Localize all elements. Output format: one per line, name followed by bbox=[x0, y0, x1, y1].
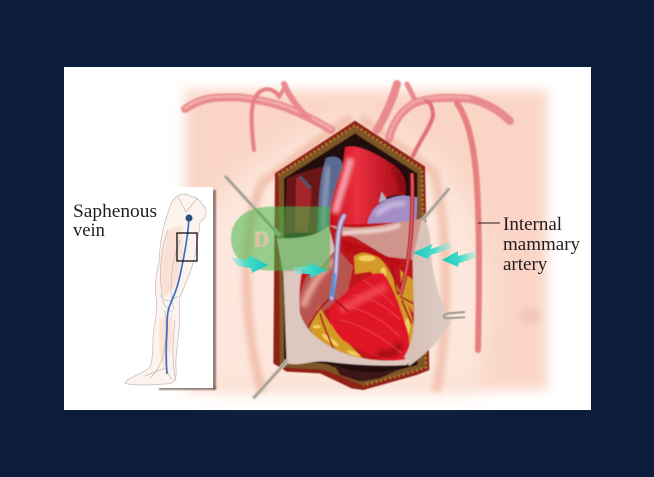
fat highlights bbox=[313, 255, 410, 357]
fat yellow bbox=[354, 253, 414, 353]
chest opening bbox=[225, 121, 465, 398]
saphenous vein line bbox=[166, 218, 189, 374]
left lung area bbox=[285, 167, 330, 233]
label: internal mammary artery: artery bbox=[503, 254, 548, 275]
arrow: far right bbox=[442, 251, 476, 267]
white panel bbox=[64, 67, 591, 410]
arrow: far left bbox=[230, 255, 268, 273]
label: internal mammary artery: mammary bbox=[503, 234, 581, 255]
pericardium sheet left and bottom bbox=[283, 267, 412, 366]
leg inset panel bbox=[64, 187, 216, 390]
ventricle bbox=[329, 273, 409, 365]
inset location box bbox=[177, 233, 197, 261]
icon: leg outline bbox=[125, 194, 206, 385]
saphenous vein graft bbox=[332, 216, 344, 298]
cyan arrows bbox=[230, 242, 476, 278]
icon: leg veins bbox=[145, 197, 197, 380]
mammary artery graft bbox=[400, 173, 412, 295]
icon: leg shading bbox=[159, 225, 183, 372]
pericardium sheet right bbox=[404, 218, 451, 366]
wound edge bbox=[273, 121, 429, 390]
label: internal mammary artery bbox=[478, 214, 581, 275]
pulmonary purple bbox=[367, 195, 417, 227]
arrow: centre left bbox=[292, 262, 327, 278]
watermark letters: D bbox=[253, 227, 269, 252]
aorta bbox=[330, 146, 406, 227]
label: internal mammary artery: Internal bbox=[503, 214, 562, 235]
vein junction dot bbox=[186, 214, 192, 222]
label: vein: vein bbox=[73, 221, 105, 241]
right atrium textured bbox=[298, 250, 353, 332]
label: saphenous vein: Saphenous bbox=[73, 202, 157, 222]
coronary arteries bbox=[306, 249, 413, 352]
retractor clamps bbox=[225, 176, 465, 398]
vena cava bbox=[317, 157, 343, 233]
cavity bbox=[284, 133, 417, 379]
heart base red bbox=[297, 222, 417, 361]
arteries of the chest bbox=[185, 84, 510, 350]
top pericardium fold bbox=[328, 218, 422, 260]
arrow: centre right bbox=[413, 242, 451, 259]
chest skin background bbox=[185, 90, 547, 392]
watermark green disc bbox=[231, 207, 330, 271]
